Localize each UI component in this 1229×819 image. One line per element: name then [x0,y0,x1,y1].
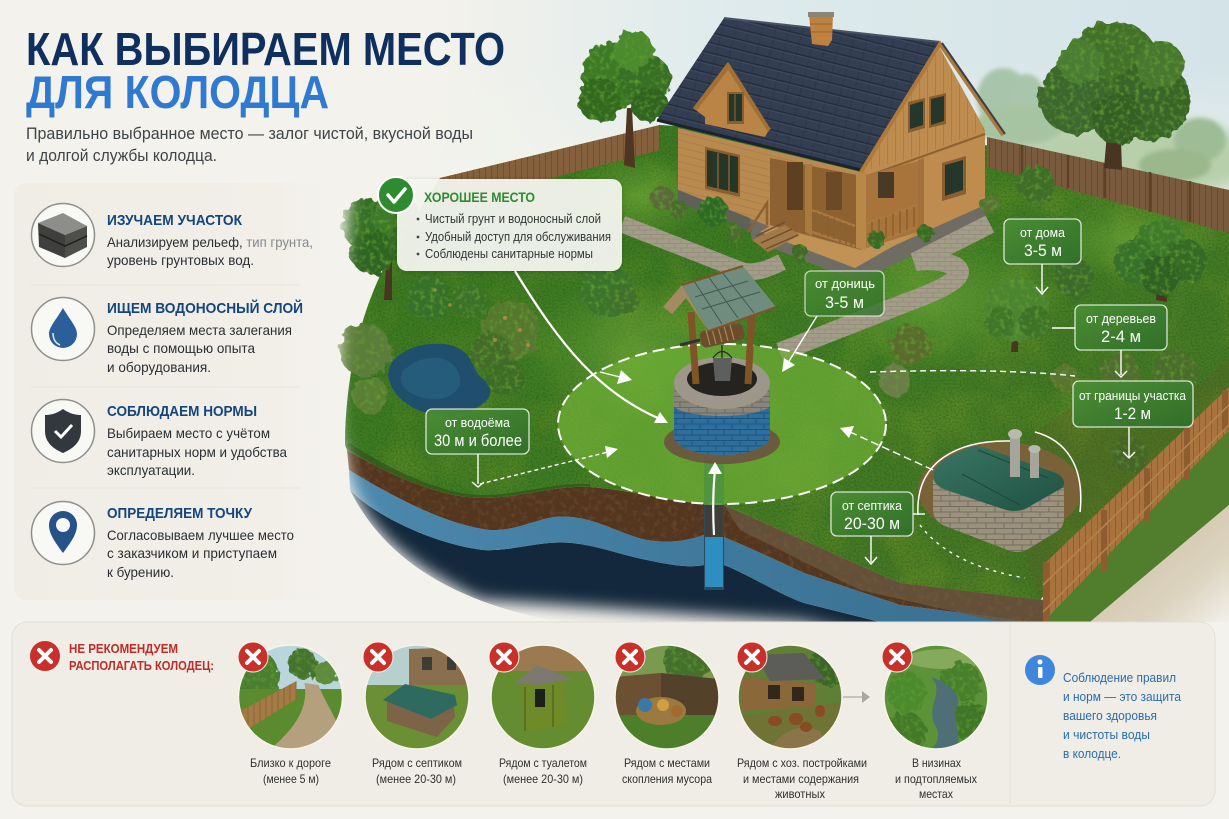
strata texture [356,456,1032,620]
item: near garbage: скопления мусора [622,772,712,786]
step: study the plot: Анализируем рельеф, тип грунта, [107,234,313,250]
trees and shrubs [339,165,1207,473]
small round tree [984,278,1051,352]
vent pipes [1008,429,1040,478]
callout: good place: ХОРОШЕЕ МЕСТО [424,189,535,205]
step: follow norms: Выбираем место с учётом [107,425,270,441]
label: from trees: от деревьев [1086,311,1156,326]
step: determine point: с заказчиком и приступаем [107,545,277,561]
icon: info [1025,655,1055,685]
step: find aquifer: ИЩЕМ ВОДОНОСНЫЙ СЛОЙ [107,299,303,317]
sky and distant landscape [430,0,1229,240]
icon: soil block [38,213,87,258]
left shrubs [339,264,639,413]
well safety zone [558,344,886,504]
illustrated plot with well [300,12,1229,640]
porch [770,158,862,250]
step: determine point: к бурению. [107,564,174,580]
pipe to groundwater [704,453,724,590]
underground water [350,490,880,622]
flowers on shrubs [433,178,1042,352]
label: from septic: от септика [842,498,903,513]
item: near septic: Рядом с септиком [372,756,462,770]
callout: good place: Удобный доступ для обслуживания [425,229,611,244]
icon: water drop [49,308,77,348]
right shrubs [879,165,1199,473]
arrow: from trees [1052,328,1127,377]
green lid [933,446,1064,511]
divider [1009,624,1011,804]
note: compliance: в колодце. [1063,746,1121,761]
arrow: distance from donits [782,316,817,372]
well stone body [674,388,770,455]
house [650,12,1005,282]
left window [705,147,740,197]
label: from septic [831,492,913,536]
gable fascia [861,44,1003,172]
note: compliance: и норм — это защита [1063,689,1182,704]
item: near farm buildings [737,642,867,801]
item: near farm buildings: животных [775,787,825,801]
stone body [933,473,1064,552]
gable windows [908,93,966,201]
item: near road [232,642,342,786]
item: near garbage: Рядом с местами [624,756,710,770]
item: near toilet [489,642,595,786]
label: from boundary [1073,381,1193,427]
heading: not recommended: РАСПОЛАГАТЬ КОЛОДЕЦ: [69,658,214,673]
steps [752,225,800,252]
lower right soil tint [724,505,1045,622]
heading: not recommended [30,641,214,673]
step: study the plot: ИЗУЧАЕМ УЧАСТОК [107,212,243,229]
dormer [693,54,786,137]
title: КАК ВЫБИРАЕМ МЕСТО [26,23,505,75]
item: near septic [363,642,469,786]
step: find aquifer [32,298,303,375]
icon: shield [45,409,81,453]
grass texture [340,120,1229,610]
step: determine point: Согласовываем лучшее место [107,527,294,543]
callout: good place: Чистый грунт и водоносный слой [425,211,601,226]
panel: selection steps [14,183,344,600]
main roof [657,18,940,170]
windlass drum [680,323,745,348]
label: from boundary: от границы участка [1079,388,1187,403]
label: from donits: от дониць [815,276,875,291]
subtitle: и долгой службы колодца. [26,146,217,165]
item: lowlands [882,642,991,801]
title: ДЛЯ КОЛОДЦА [26,66,329,118]
dirt ring [918,442,1082,538]
water layer [349,470,1030,622]
subtitle [26,124,473,165]
note: compliance: Соблюдение правил [1063,670,1176,685]
step: follow norms: санитарных норм и удобства [107,444,287,460]
well [663,266,780,464]
note: compliance: и чистоты воды [1063,727,1150,742]
house walls [678,128,861,262]
step: find aquifer: Определяем места залегания [107,322,292,338]
step: study the plot [32,204,313,268]
dashed line to boundary [870,371,1075,376]
arrow: from pond [472,446,618,487]
item: lowlands: и подтопляемых [895,772,977,786]
step: follow norms: эксплуатации. [107,462,195,478]
grass ground [345,125,1229,600]
label: from trees: 2-4 м [1101,327,1141,346]
soil layer [347,450,1045,622]
big tree right [1039,21,1190,170]
back left fence [440,125,660,207]
label: from boundary: 1-2 м [1114,404,1151,423]
left tree [342,191,423,300]
arrow: zone marker [600,370,632,384]
well roof [663,266,776,332]
step: determine point: ОПРЕДЕЛЯЕМ ТОЧКУ [107,505,253,522]
front fence [1043,387,1229,622]
foundation [748,205,985,282]
arrow: callout to well [515,271,668,423]
arrow: from house [1036,264,1048,294]
label: from septic: 20-30 м [844,514,900,533]
label: from donits: 3-5 м [825,293,864,312]
note: compliance: вашего здоровья [1063,708,1157,723]
step: study the plot: уровень грунтовых вод. [107,252,254,268]
label: from trees [1075,305,1167,350]
label: from pond [426,409,529,454]
well posts [691,312,752,384]
label: from donits [805,271,884,316]
item: near road: (менее 5 м) [263,772,319,786]
tree behind house [578,30,671,168]
item: lowlands: В низинах [912,756,961,770]
step: find aquifer: воды с помощью опыта [107,340,255,356]
item: near toilet: (менее 20-30 м) [503,772,583,786]
arrow: grey [843,691,870,703]
bucket [713,345,732,381]
arrow: from boundary [1123,427,1135,458]
step: find aquifer: и оборудования. [107,359,211,375]
title [26,23,505,118]
right tree [1113,220,1207,302]
label: from pond: от водоёма [445,415,511,430]
outer verge [1043,428,1229,622]
note: compliance [1025,655,1182,761]
chimney [808,12,834,46]
pond [388,344,491,416]
label: from house: 3-5 м [1024,241,1062,260]
scene edge fade [300,180,880,640]
step: determine point [32,502,294,580]
item: near road: Близко к дороге [250,756,331,770]
panel: not recommended [12,622,1215,806]
label: from pond: 30 м и более [434,431,522,450]
callout: good place: Соблюдены санитарные нормы [425,246,593,261]
item: near farm buildings: Рядом с хоз. постройками [737,756,867,770]
item: lowlands: местах [919,787,953,801]
item: near toilet: Рядом с туалетом [499,756,587,770]
well rim [674,357,770,409]
icon: green check [378,177,414,213]
dirt road corner [1090,505,1229,622]
bushes at house [650,186,1000,260]
back right fence [987,137,1229,233]
item: near septic: (менее 20-30 м) [376,772,456,786]
well base ring [664,420,780,464]
porch railings [812,205,918,246]
label: from house: от дома [1020,225,1066,240]
item: near garbage [615,635,719,786]
arrow: pipe up [708,462,722,535]
subtitle: Правильно выбранное место — залог чистой, вкусной воды [26,124,473,143]
stone paths [622,224,990,352]
callout: good place [378,177,622,271]
septic tank [918,429,1082,552]
arrow: from septic [840,426,1025,578]
item: near farm buildings: и местами содержания [743,772,859,786]
step: follow norms: СОБЛЮДАЕМ НОРМЫ [107,403,257,420]
heading: not recommended: НЕ РЕКОМЕНДУЕМ [69,641,178,656]
icon: location pin [49,511,77,553]
step: follow norms [32,400,287,478]
label: from house [1004,219,1081,264]
